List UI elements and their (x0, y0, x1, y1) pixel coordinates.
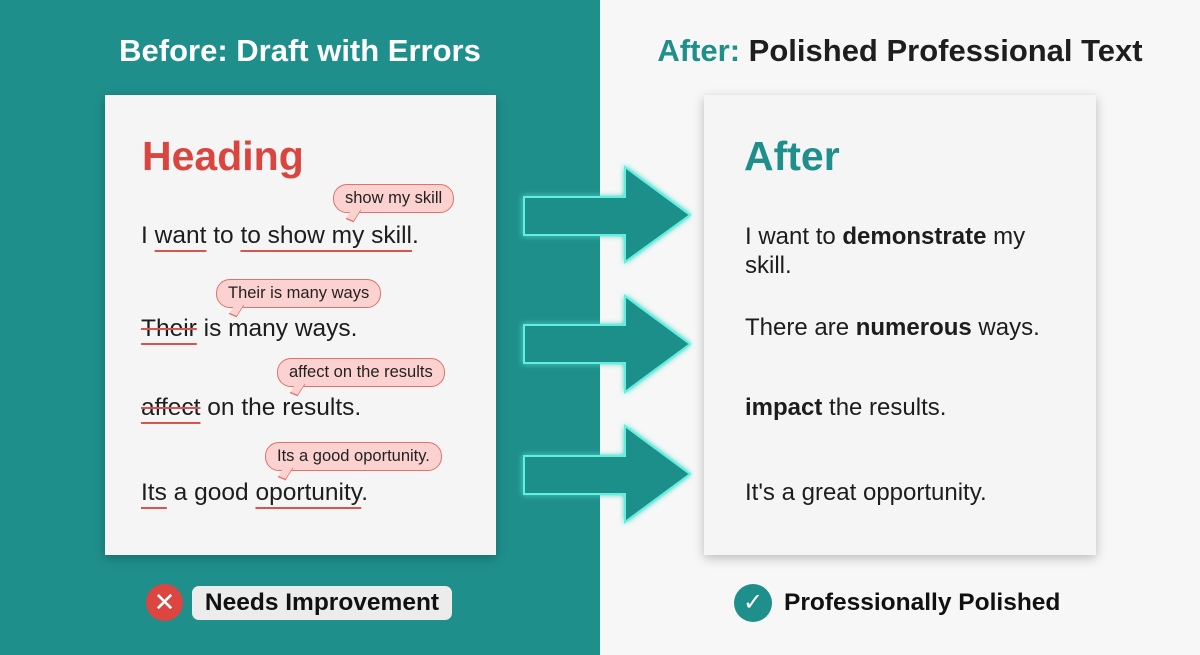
bubble 2: Their is many ways (228, 284, 369, 302)
bubble 1: show my skill (345, 189, 442, 207)
bubble 3 (277, 358, 445, 387)
title: before: Before: Draft with Errors (119, 33, 481, 68)
icon: x (146, 584, 183, 621)
icon: x: ✕ (154, 587, 175, 617)
badge: polished (734, 584, 1060, 622)
icon: check (734, 584, 772, 622)
arrow 3 (524, 426, 690, 522)
left teal background (0, 0, 600, 655)
heading after: After (744, 133, 840, 179)
arrow 2 (524, 296, 690, 392)
bubble 2 (216, 279, 381, 308)
arrow 1 (524, 167, 690, 262)
panel: draft card (105, 95, 496, 555)
line 2: Their is many ways. (141, 315, 357, 342)
icon: check: ✓ (743, 589, 763, 616)
bubble 4 (265, 442, 442, 471)
bubble 3: affect on the results (289, 363, 433, 381)
line 1: I want to to show my skill. (141, 222, 419, 249)
badge: needs improvement (146, 584, 452, 621)
line 1 (745, 223, 1025, 279)
heading: Heading (142, 133, 304, 179)
bubble 4: Its a good oportunity. (277, 447, 430, 465)
line 4: Its a good oportunity. (141, 479, 368, 506)
line 4: It's a great opportunity. (745, 479, 987, 506)
panel: polished card (704, 95, 1096, 555)
line 1: I want to demonstrate my (745, 223, 1025, 250)
line 1: skill. (745, 252, 792, 279)
line 3: affect on the results. (141, 394, 361, 421)
bubble 1 (333, 184, 454, 213)
label: Professionally Polished (784, 589, 1060, 616)
label: Needs Improvement (205, 589, 439, 616)
line 3: impact the results. (745, 394, 946, 421)
line 2: There are numerous ways. (745, 314, 1040, 341)
title: after: After: Polished Professional Text (657, 33, 1143, 68)
